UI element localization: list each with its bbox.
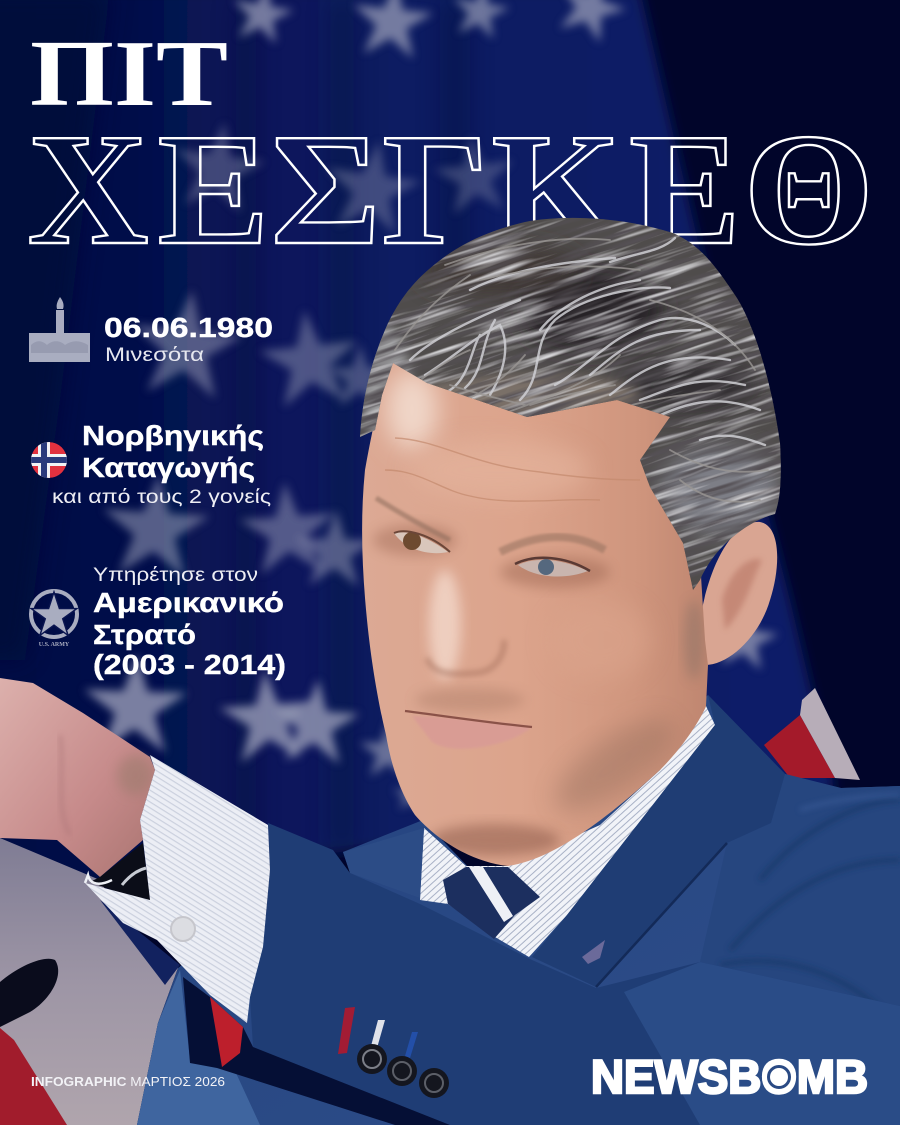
info: origin	[31, 420, 271, 508]
military intro: Υπηρέτησε στον	[93, 565, 258, 586]
logo: newsbomb: NEWSBOMB	[591, 1050, 868, 1103]
origin heading: Νορβηγικής	[82, 420, 264, 451]
mic	[0, 959, 58, 1027]
icon: birthday cake	[29, 297, 90, 362]
icon: norwegian flag	[31, 442, 67, 478]
shirt cuff	[85, 755, 270, 1023]
cuff button	[171, 917, 195, 941]
blurred stars	[82, 0, 782, 810]
title: first name: ΠΙΤ	[30, 22, 228, 126]
white and red stripes bottom left	[0, 838, 180, 1125]
origin heading second line: Καταγωγής	[82, 452, 255, 483]
eyebrow left	[376, 498, 450, 540]
face	[362, 350, 708, 866]
origin note: και από τους 2 γονείς	[52, 487, 271, 508]
left shoulder collar edge	[343, 828, 424, 898]
lapel pin	[582, 940, 605, 964]
icon: us army star	[31, 591, 77, 648]
lapel	[532, 695, 785, 987]
hand	[0, 678, 155, 877]
footer label: INFOGRAPHIC ΜΑΡΤΙΟΣ 2026	[31, 1075, 225, 1089]
title: last name outlined: ΧΕΣΓΚΕΘ	[27, 102, 874, 278]
info: birth	[29, 297, 273, 366]
eye right	[515, 558, 590, 577]
forehead wrinkles	[385, 438, 640, 501]
mouth	[405, 711, 532, 749]
suit body	[137, 695, 900, 1125]
military heading: Αμερικανικό	[93, 587, 284, 618]
sleeve right fold	[624, 962, 900, 1125]
info: military	[31, 565, 286, 680]
jacket sleeve	[250, 823, 900, 1125]
birth date: 06.06.1980	[104, 312, 273, 343]
hair	[360, 218, 781, 590]
icon: us army star: U.S. ARMY	[39, 642, 70, 648]
watch	[85, 843, 150, 900]
nose	[427, 640, 504, 674]
birth place: Μινεσότα	[105, 345, 204, 366]
military heading second line: Στρατό	[93, 619, 196, 650]
red and white stripes right	[764, 688, 860, 780]
sleeve buttons	[338, 1007, 449, 1098]
ear	[695, 522, 777, 665]
sleeve hem and lining	[183, 977, 450, 1125]
tie	[443, 867, 540, 939]
eye left	[394, 531, 450, 553]
shirt collar	[420, 706, 715, 957]
eyebrow right	[500, 537, 605, 552]
service years: (2003 - 2014)	[93, 649, 286, 680]
